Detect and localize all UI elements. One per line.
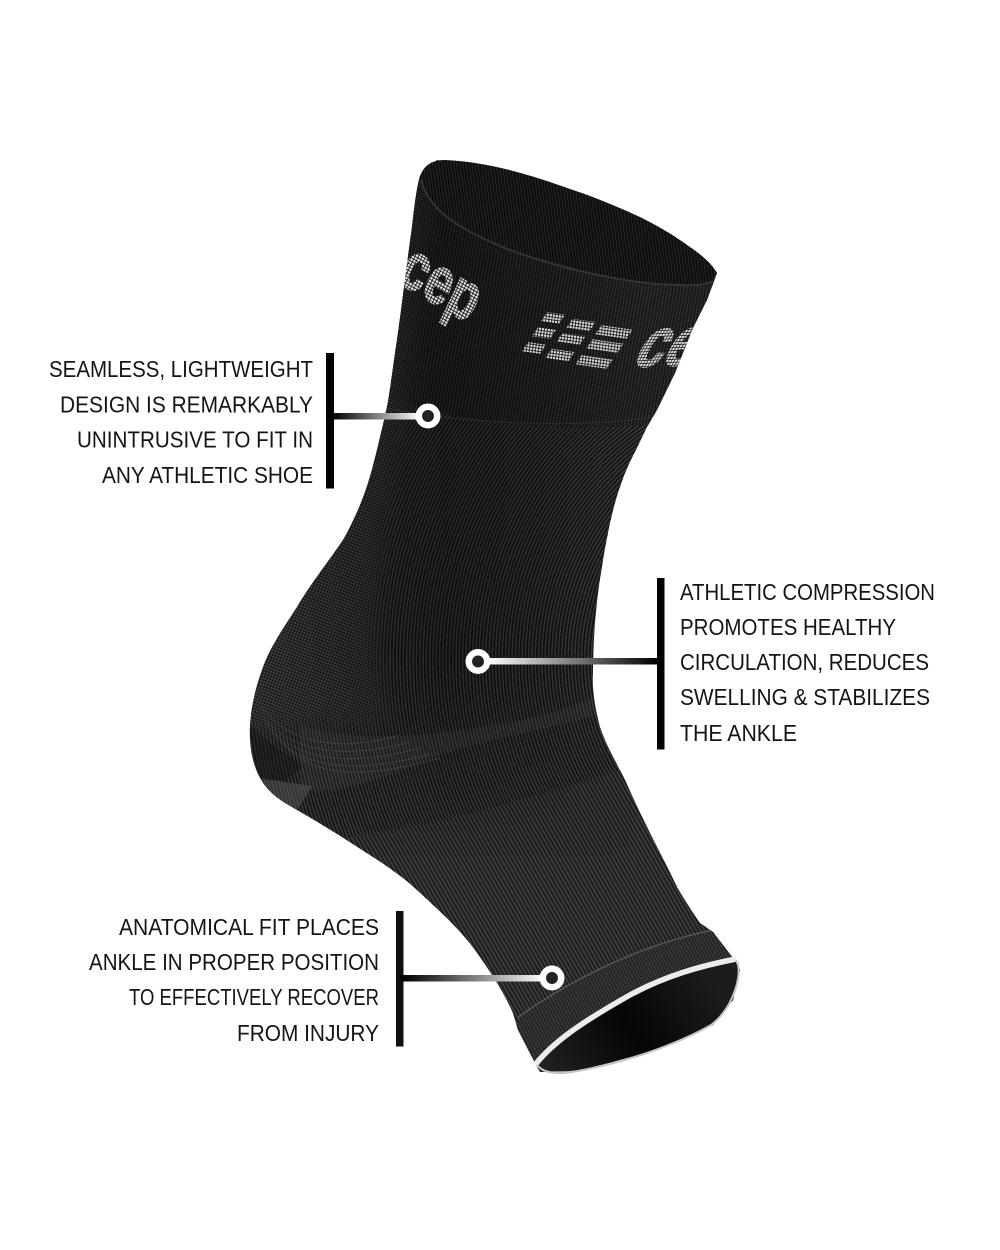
curved heel knit lines [262, 708, 440, 772]
bottom opening interior [538, 960, 739, 1072]
callout text: CIRCULATION, REDUCES [680, 649, 929, 675]
light heel patch [260, 778, 312, 810]
top rim edge [421, 180, 713, 285]
far hem edge [537, 960, 739, 1073]
connector line [485, 658, 658, 664]
vertical bar [657, 578, 664, 750]
cep logo on front of cuff: ce [621, 303, 723, 383]
vertical bar [326, 353, 334, 488]
callout text: ANATOMICAL FIT PLACES [119, 914, 379, 940]
top opening interior [420, 160, 717, 286]
callout text: ANY ATHLETIC SHOE [102, 462, 313, 488]
callout text: ANKLE IN PROPER POSITION [89, 949, 379, 975]
marker [543, 969, 561, 987]
callout: athletic compression [469, 578, 935, 750]
callout text [680, 579, 935, 746]
callout text: UNINTRUSIVE TO FIT IN [77, 426, 313, 452]
callout text: SWELLING & STABILIZES [680, 684, 930, 710]
white bottom hem [535, 959, 736, 1065]
callout text: PROMOTES HEALTHY [680, 614, 896, 640]
sleeve body with knit ribs [250, 160, 740, 1072]
darker heel cup [248, 722, 303, 780]
callout: seamless design [49, 353, 437, 488]
side-to-side shading [310, 160, 574, 780]
bottom collar [516, 930, 740, 1072]
callout text [49, 356, 313, 488]
callout text: THE ANKLE [680, 720, 797, 746]
speckled band across the ankle [300, 692, 605, 791]
logo chevrons [522, 312, 632, 369]
vertical bar [396, 911, 404, 1046]
marker [419, 407, 437, 425]
callout text [89, 914, 379, 1046]
cep logo on left of cuff: cep [390, 229, 494, 336]
heel and back-of-leg weave [250, 160, 437, 737]
callout text: ATHLETIC COMPRESSION [680, 579, 935, 605]
callout text: DESIGN IS REMARKABLY [60, 392, 313, 418]
marker [469, 652, 487, 671]
connector line [400, 975, 546, 982]
callout text: TO EFFECTIVELY RECOVER [129, 984, 379, 1010]
callout text: SEAMLESS, LIGHTWEIGHT [49, 356, 313, 382]
connector line [333, 413, 421, 420]
callout text: FROM INJURY [237, 1020, 379, 1046]
product photo: black compression ankle sleeve [250, 160, 740, 1074]
callout: anatomical fit [89, 911, 561, 1046]
